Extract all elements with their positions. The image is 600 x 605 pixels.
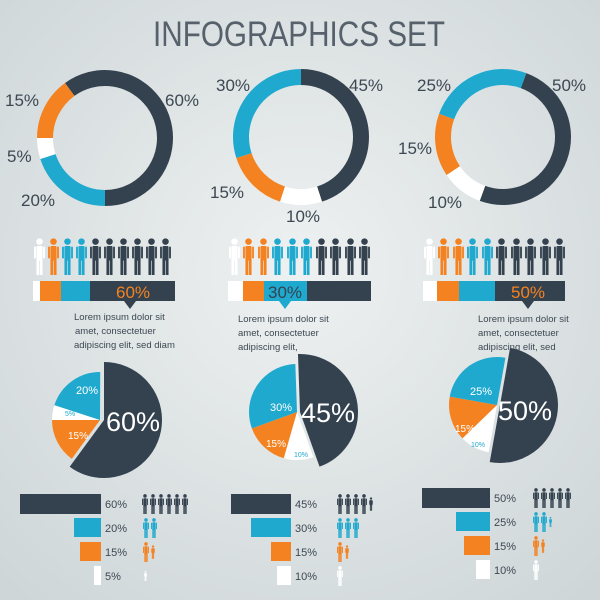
- people row 1: [34, 238, 171, 275]
- donut chart 3: [398, 54, 586, 220]
- people row 2: [229, 238, 370, 275]
- text block 2: adipiscing elit,: [238, 342, 298, 353]
- stacked bar 3: 50%: [511, 283, 545, 302]
- text block 1: Lorem ipsum dolor sit: [74, 312, 165, 323]
- donut chart 2: 30%: [216, 76, 250, 95]
- donut chart 2: 10%: [286, 207, 320, 226]
- bar list 2: [231, 494, 373, 586]
- text block 3: [478, 314, 569, 353]
- donut chart 3: 50%: [552, 76, 586, 95]
- pie chart 1: 5%: [65, 411, 75, 418]
- pie chart 1: 15%: [68, 431, 88, 442]
- stacked bar 1: 60%: [116, 283, 150, 302]
- pie chart 2: 45%: [301, 398, 355, 428]
- bar list 1: 5%: [105, 571, 121, 583]
- donut chart 3: 10%: [428, 193, 462, 212]
- donut chart 3: 15%: [398, 139, 432, 158]
- bar list 2: 30%: [295, 523, 317, 535]
- bar list 3: 50%: [494, 493, 516, 505]
- title: INFOGRAPHICS SET: [153, 15, 445, 54]
- donut chart 2: 15%: [210, 183, 244, 202]
- bar list 3: [422, 488, 571, 580]
- stacked bar 2: [228, 281, 371, 309]
- donut chart 1: [5, 54, 199, 222]
- pie chart 2: [266, 381, 355, 459]
- pie chart 3: 25%: [470, 386, 492, 398]
- donut chart 1: 15%: [5, 91, 39, 110]
- pie chart 3: 50%: [498, 396, 552, 426]
- pie chart 2: 10%: [294, 452, 308, 459]
- bar list 3: 15%: [494, 541, 516, 553]
- donut chart 2: 45%: [349, 76, 383, 95]
- bar list 2: 45%: [295, 499, 317, 511]
- bar list 3: 25%: [494, 517, 516, 529]
- text block 2: amet, consectetuer: [238, 328, 319, 339]
- pie chart 1: [65, 385, 160, 454]
- bar list 1: 20%: [105, 523, 127, 535]
- text block 3: adipiscing elit, sed: [478, 342, 556, 353]
- stacked bar 2: 30%: [268, 283, 302, 302]
- pie chart 3: 10%: [471, 442, 485, 449]
- text block 3: Lorem ipsum dolor sit: [478, 314, 569, 325]
- donut chart 1: 5%: [7, 147, 32, 166]
- bar list 3: 10%: [494, 565, 516, 577]
- bar list 2: 15%: [295, 547, 317, 559]
- people row 3: [424, 238, 565, 275]
- pie chart 1: 20%: [76, 385, 98, 397]
- text block 1: adipiscing elit, sed diam: [74, 340, 175, 351]
- pie chart 3: [455, 371, 552, 449]
- pie chart 2: 15%: [266, 439, 286, 450]
- text block 2: [238, 314, 329, 353]
- donut chart 3: 25%: [417, 76, 451, 95]
- donut chart 2: [210, 61, 383, 226]
- bar list 2: 10%: [295, 571, 317, 583]
- bar list 1: 15%: [105, 547, 127, 559]
- text block 1: amet, consectetuer: [75, 326, 156, 337]
- pie chart 1: 60%: [106, 407, 160, 437]
- donut chart 1: 20%: [21, 191, 55, 210]
- text block 1: [74, 312, 175, 351]
- donut chart 1: 60%: [165, 91, 199, 110]
- stacked bar 1: [33, 281, 175, 309]
- pie chart 2: 30%: [270, 402, 292, 414]
- text block 2: Lorem ipsum dolor sit: [238, 314, 329, 325]
- bar list 1: 60%: [105, 499, 127, 511]
- bar list 1: [20, 494, 188, 585]
- pie chart 3: 15%: [455, 424, 475, 435]
- stacked bar 3: [423, 281, 565, 309]
- text block 3: amet, consectetuer: [478, 328, 559, 339]
